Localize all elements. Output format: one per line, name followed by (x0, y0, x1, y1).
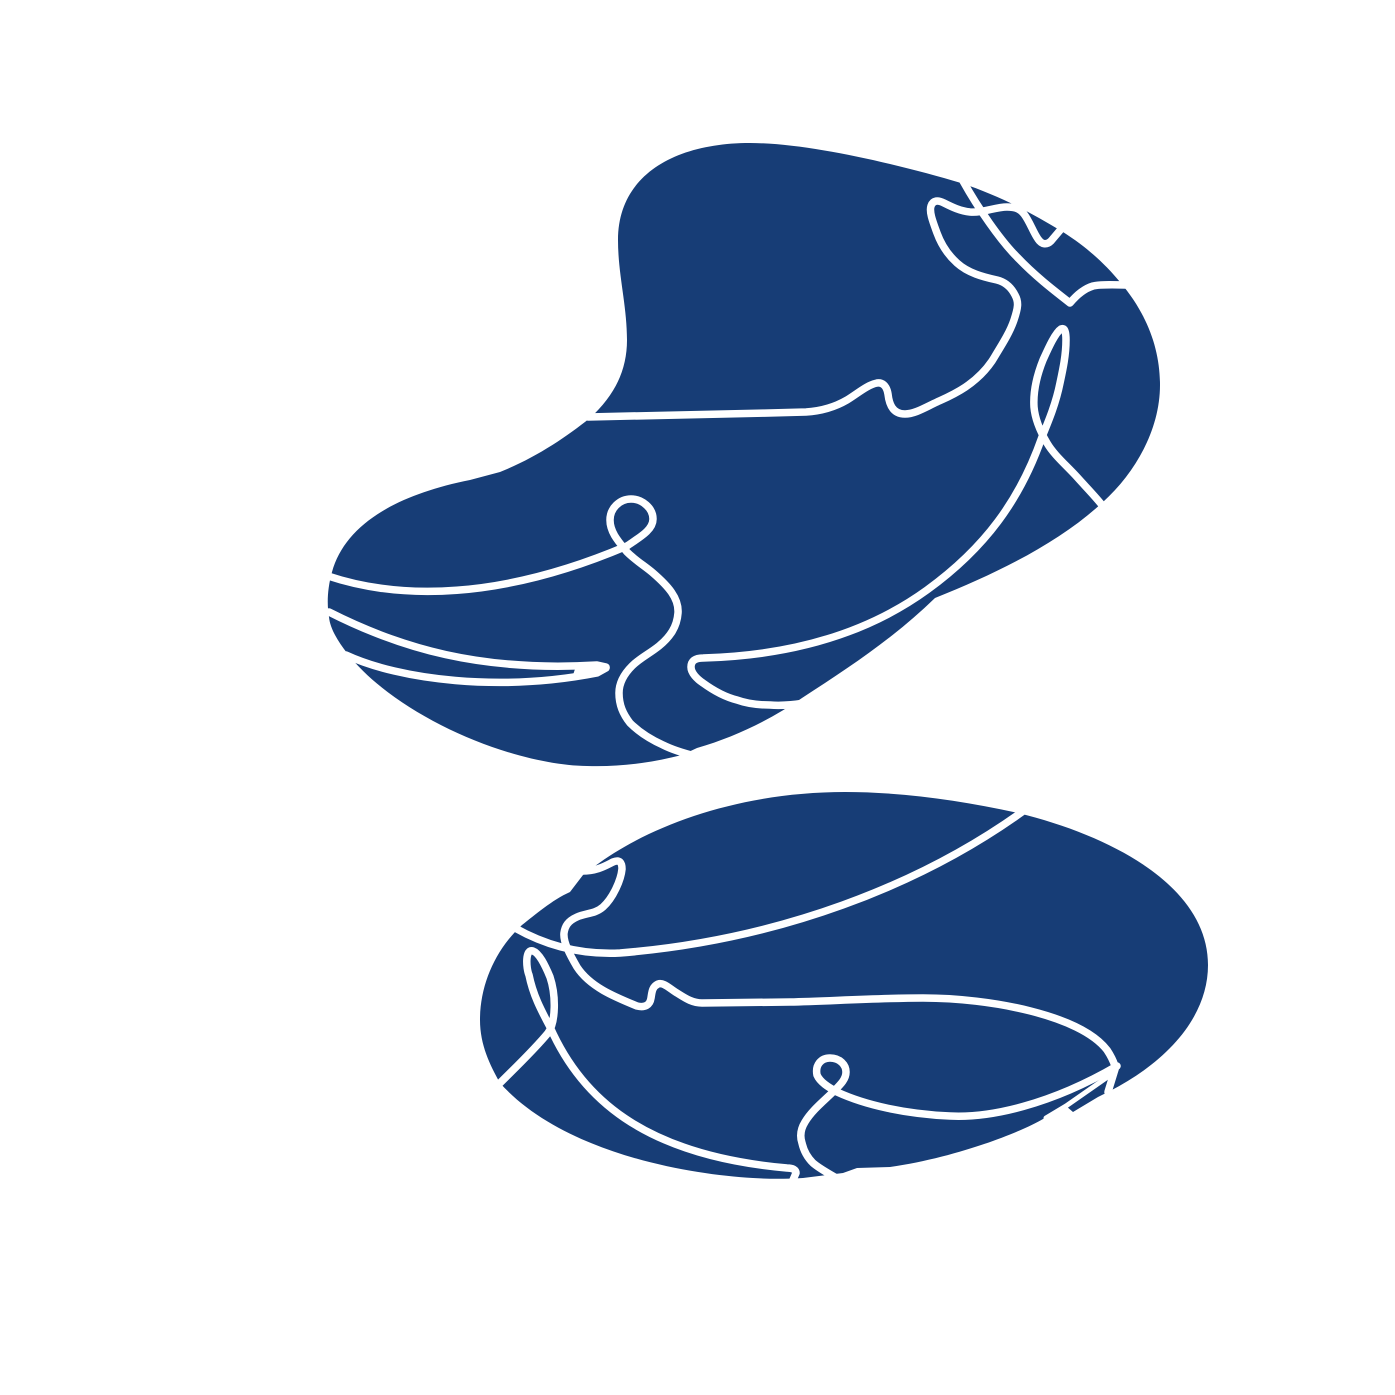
whale outline strokes (498, 812, 1117, 1180)
head crossing line (963, 181, 1131, 303)
upper blob shape (328, 143, 1160, 766)
whale outline strokes (328, 181, 1131, 756)
upper blob with whale line art (328, 143, 1160, 766)
back and head line (588, 201, 1062, 417)
lower jaw top line (329, 612, 606, 667)
jaw tip (572, 664, 608, 678)
mouth line with eye loop (328, 499, 695, 756)
jaw tip strokes (1108, 1066, 1116, 1092)
belly crossing line (515, 812, 1022, 953)
mouth line with eye loop (801, 1058, 1117, 1179)
tail fin and belly line (691, 329, 1102, 705)
head and back line (564, 861, 1115, 1066)
tail fin and belly line (498, 951, 796, 1180)
lower blob with whale line art (480, 792, 1208, 1180)
lower jaw bottom line (346, 655, 606, 682)
lower blob shape (480, 792, 1208, 1179)
